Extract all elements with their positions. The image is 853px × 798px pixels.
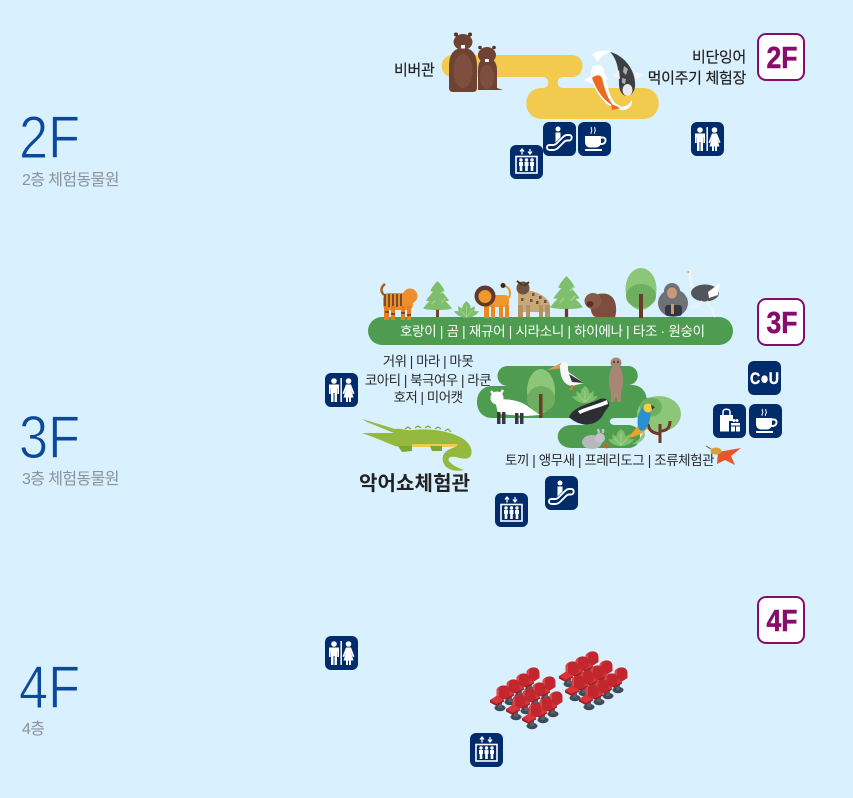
hyena xyxy=(516,281,550,317)
heading: 3F xyxy=(19,404,119,488)
illustration: mid animals xyxy=(490,358,741,465)
badge: 3F: 3F xyxy=(766,305,798,340)
icon: C&U store xyxy=(748,361,781,395)
heading: 2F: 2F xyxy=(19,104,80,171)
heading: 4F: 4F xyxy=(19,654,80,721)
right tree xyxy=(637,396,681,443)
label: mid animal list: 코아티 | 북극여우 | 라쿤 xyxy=(365,373,491,388)
label: mid animal list: 거위 | 마라 | 마못 xyxy=(383,354,473,369)
badge: 2F xyxy=(758,34,804,80)
pelican xyxy=(547,362,584,389)
parrot xyxy=(627,404,655,444)
badge: 4F xyxy=(758,597,804,643)
lion xyxy=(474,283,510,318)
badge: 4F: 4F xyxy=(766,603,798,638)
rabbit xyxy=(582,429,609,449)
heading: 3F: 3층 체험동물원 xyxy=(22,470,119,488)
tiger xyxy=(381,284,418,320)
icon: escalator 2F xyxy=(543,122,576,156)
tree xyxy=(527,369,555,418)
illustration: theatre seats left group xyxy=(490,667,562,729)
icon: elevator 3F xyxy=(495,493,528,527)
icon: elevator 4F xyxy=(470,733,503,767)
skunk xyxy=(569,398,609,424)
label: crocodile show hall: 악어쇼체험관 xyxy=(359,472,470,495)
label: top row animal list: 호랑이 | 곰 | 재규어 | 시라소니 | 하이에나 | 타조 · 원숭이 xyxy=(400,324,705,339)
icon: restroom 3F xyxy=(325,373,358,407)
2F yellow path xyxy=(442,55,659,119)
heading: 3F: 3F xyxy=(19,404,80,471)
icon: cafe 3F xyxy=(749,404,782,438)
meerkat xyxy=(609,358,623,402)
icon: cafe 2F xyxy=(578,122,611,156)
ostrich xyxy=(686,270,720,317)
label: koi feeding xyxy=(648,49,746,87)
label: lower animal list: 토끼 | 앵무새 | 프레리도그 | 조류체험관 xyxy=(505,453,714,468)
heading: 4F: 4층 xyxy=(22,720,44,738)
icon: elevator 2F xyxy=(510,145,543,179)
hummingbird xyxy=(706,446,741,465)
icon: shop xyxy=(713,404,746,438)
label: mid animal list: 호저 | 미어캣 xyxy=(393,390,463,405)
3F green island xyxy=(477,366,647,448)
3F green bar xyxy=(368,317,733,345)
heading: 2F: 2층 체험동물원 xyxy=(22,171,119,189)
icon: restroom 4F xyxy=(325,636,358,670)
illustration: crocodile xyxy=(362,419,472,471)
arctic fox xyxy=(490,390,540,424)
badge: 2F: 2F xyxy=(766,40,798,75)
icon: restroom 2F xyxy=(691,122,724,156)
tree: round xyxy=(626,268,656,318)
illustration: top row animals and trees xyxy=(381,268,720,320)
illustration: beavers xyxy=(449,32,503,92)
icon: C&U store: C●U xyxy=(750,369,779,388)
illustration: koi fish xyxy=(584,51,643,110)
badge: 3F xyxy=(758,299,804,345)
chimpanzee xyxy=(658,283,688,317)
label: koi feeding: 비단잉어 xyxy=(692,49,746,66)
label: mid animal list xyxy=(365,354,491,405)
label: beaver hall: 비버관 xyxy=(394,62,435,79)
label: koi feeding: 먹이주기 체험장 xyxy=(648,70,746,87)
heading: 2F xyxy=(19,104,119,189)
bear xyxy=(584,293,616,317)
icon: escalator 3F xyxy=(545,476,578,510)
illustration: theatre seats right group xyxy=(559,651,628,710)
